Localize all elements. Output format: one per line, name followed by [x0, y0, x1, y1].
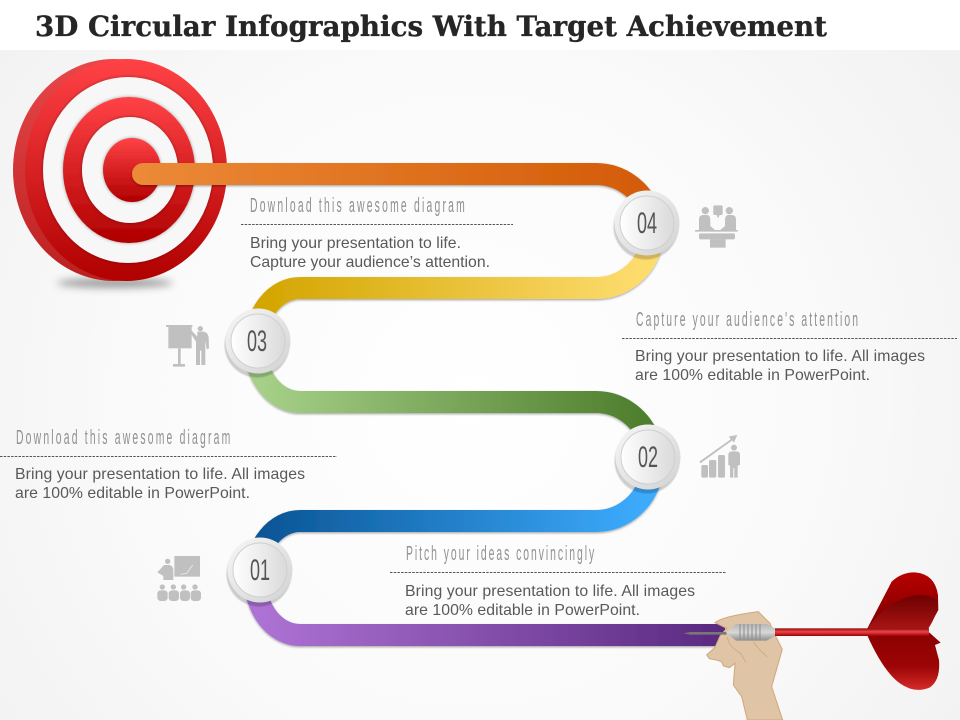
text block: download diagram top: [241, 196, 513, 271]
hand: [707, 612, 783, 720]
dart shaft: [775, 628, 929, 636]
text block: capture attention: [622, 310, 957, 384]
icon: growth chart with person: [699, 435, 740, 478]
ribbon segment: green: [255, 345, 650, 442]
illustration: hand holding dart: [683, 572, 941, 720]
hand creases: [727, 637, 767, 663]
text block: download diagram top: Bring your presentation to life.: [250, 235, 461, 252]
icon: target: [13, 59, 227, 288]
icon: meeting at table: [695, 205, 738, 248]
step 01 badge: [226, 538, 292, 606]
text block: download diagram left: Download this awesome diagram: [16, 428, 230, 449]
step 03 badge: 03: [247, 326, 267, 358]
dart needle: [683, 632, 727, 635]
text block: download diagram left: [0, 428, 337, 502]
title: 3D Circular Infographics With Target Achievement: [35, 10, 827, 43]
flight: lower: [867, 632, 941, 690]
step 02 badge: 02: [638, 442, 658, 474]
ribbon segment: yellow: [255, 249, 650, 345]
icon: presenter with audience: [157, 556, 201, 601]
text block: capture attention: Bring your presentation to life. All images: [635, 348, 925, 365]
dart barrel: [726, 624, 775, 641]
step 01 badge: 01: [250, 555, 270, 587]
text block: pitch ideas: [390, 544, 726, 619]
step 04 badge: [614, 190, 680, 260]
text block: pitch ideas: are 100% editable in PowerPoint.: [405, 602, 640, 619]
text block: pitch ideas: Bring your presentation to life. All images: [405, 583, 695, 600]
text block: capture attention: Capture your audience's attention: [636, 310, 858, 331]
ribbon segment: orange: [143, 174, 650, 213]
text block: download diagram left: are 100% editable in PowerPoint.: [15, 485, 250, 502]
text block: download diagram top: Capture your audience’s attention.: [250, 254, 490, 271]
text block: download diagram left: Bring your presentation to life. All images: [15, 466, 305, 483]
text block: pitch ideas: Pitch your ideas convincingly: [406, 544, 594, 565]
step 03 badge: [224, 308, 290, 378]
text block: download diagram top: Download this awesome diagram: [250, 196, 465, 217]
barrel ridges: [740, 624, 760, 641]
icon: presenter at board: [166, 325, 209, 367]
step 02 badge: [614, 424, 680, 494]
ribbon path: [143, 174, 725, 635]
text block: capture attention: are 100% editable in PowerPoint.: [635, 367, 870, 384]
step 04 badge: 04: [637, 208, 657, 240]
ribbon segment: purple: [255, 578, 725, 635]
flight: upper fold: [867, 595, 938, 628]
flight: upper: [867, 572, 938, 628]
ribbon segment: blue: [255, 480, 650, 578]
